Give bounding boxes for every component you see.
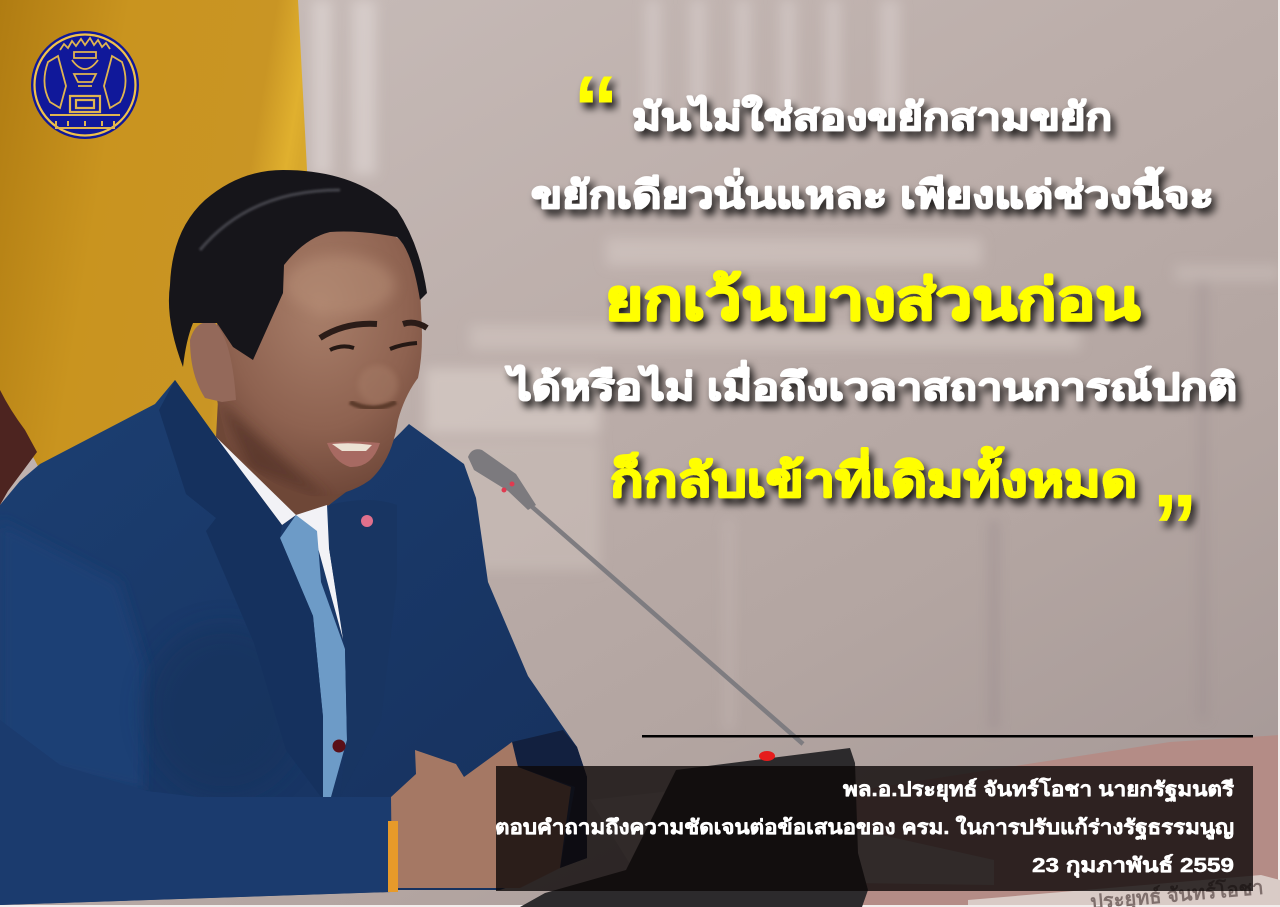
quote highlight line 3: ยกเว้นบางส่วนก่อน — [605, 268, 1140, 331]
opening quotation mark: “ — [573, 58, 619, 160]
name placard — [968, 875, 1280, 907]
closing quotation mark: ” — [1152, 476, 1198, 578]
divider line — [642, 735, 1253, 738]
hair — [169, 170, 427, 367]
conference unit on desk — [520, 748, 868, 907]
lapel pin — [361, 515, 373, 527]
context line: ตอบคำถามถึงความชัดเจนต่อข้อเสนอของ ครม. ในการปรับแก้ร่างรัฐธรรมนูญ — [495, 815, 1234, 841]
face — [217, 226, 422, 496]
ornate chair at left edge — [0, 390, 37, 505]
eyes — [330, 343, 417, 350]
quote line 4: ได้หรือไม่ เมื่อถึงเวลาสถานการณ์ปกติ — [504, 360, 1237, 409]
necktie — [280, 515, 347, 797]
near sleeve — [1, 792, 391, 905]
far sleeve cuff — [512, 730, 587, 868]
government seal emblem — [31, 31, 139, 139]
nose and mouth — [350, 402, 396, 408]
caption panel background — [496, 766, 1253, 891]
tie pin button — [332, 740, 346, 752]
left lapel — [159, 380, 323, 797]
quote line 1: มันไม่ใช่สองขยักสามขยัก — [632, 95, 1112, 139]
ear — [190, 322, 236, 402]
photo: man seated at the desk — [0, 170, 587, 905]
shirt collar — [216, 437, 343, 639]
date: 23 กุมภาพันธ์ 2559 — [1032, 854, 1234, 878]
hair highlight — [200, 190, 340, 250]
papers on desk — [590, 790, 994, 885]
desk surface — [560, 735, 1280, 907]
hands — [391, 742, 571, 888]
yellow curtain — [0, 0, 307, 470]
eyebrows — [320, 323, 427, 338]
neck — [216, 400, 375, 525]
microphone — [468, 449, 803, 744]
caption text — [495, 777, 1234, 878]
arm shading crease — [6, 564, 142, 787]
body shading — [145, 625, 305, 795]
orange wristband — [388, 821, 398, 892]
face shading — [217, 255, 398, 500]
suit jacket — [0, 380, 587, 905]
right lapel — [329, 500, 397, 797]
quote highlight line 5: ก็กลับเข้าที่เดิมทั้งหมด — [610, 446, 1137, 506]
speaker name: พล.อ.ประยุทธ์ จันทร์โอชา นายกรัฐมนตรี — [843, 777, 1234, 803]
quote line 2: ขยักเดียวนั่นแหละ เพียงแต่ช่วงนี้จะ — [531, 167, 1214, 217]
